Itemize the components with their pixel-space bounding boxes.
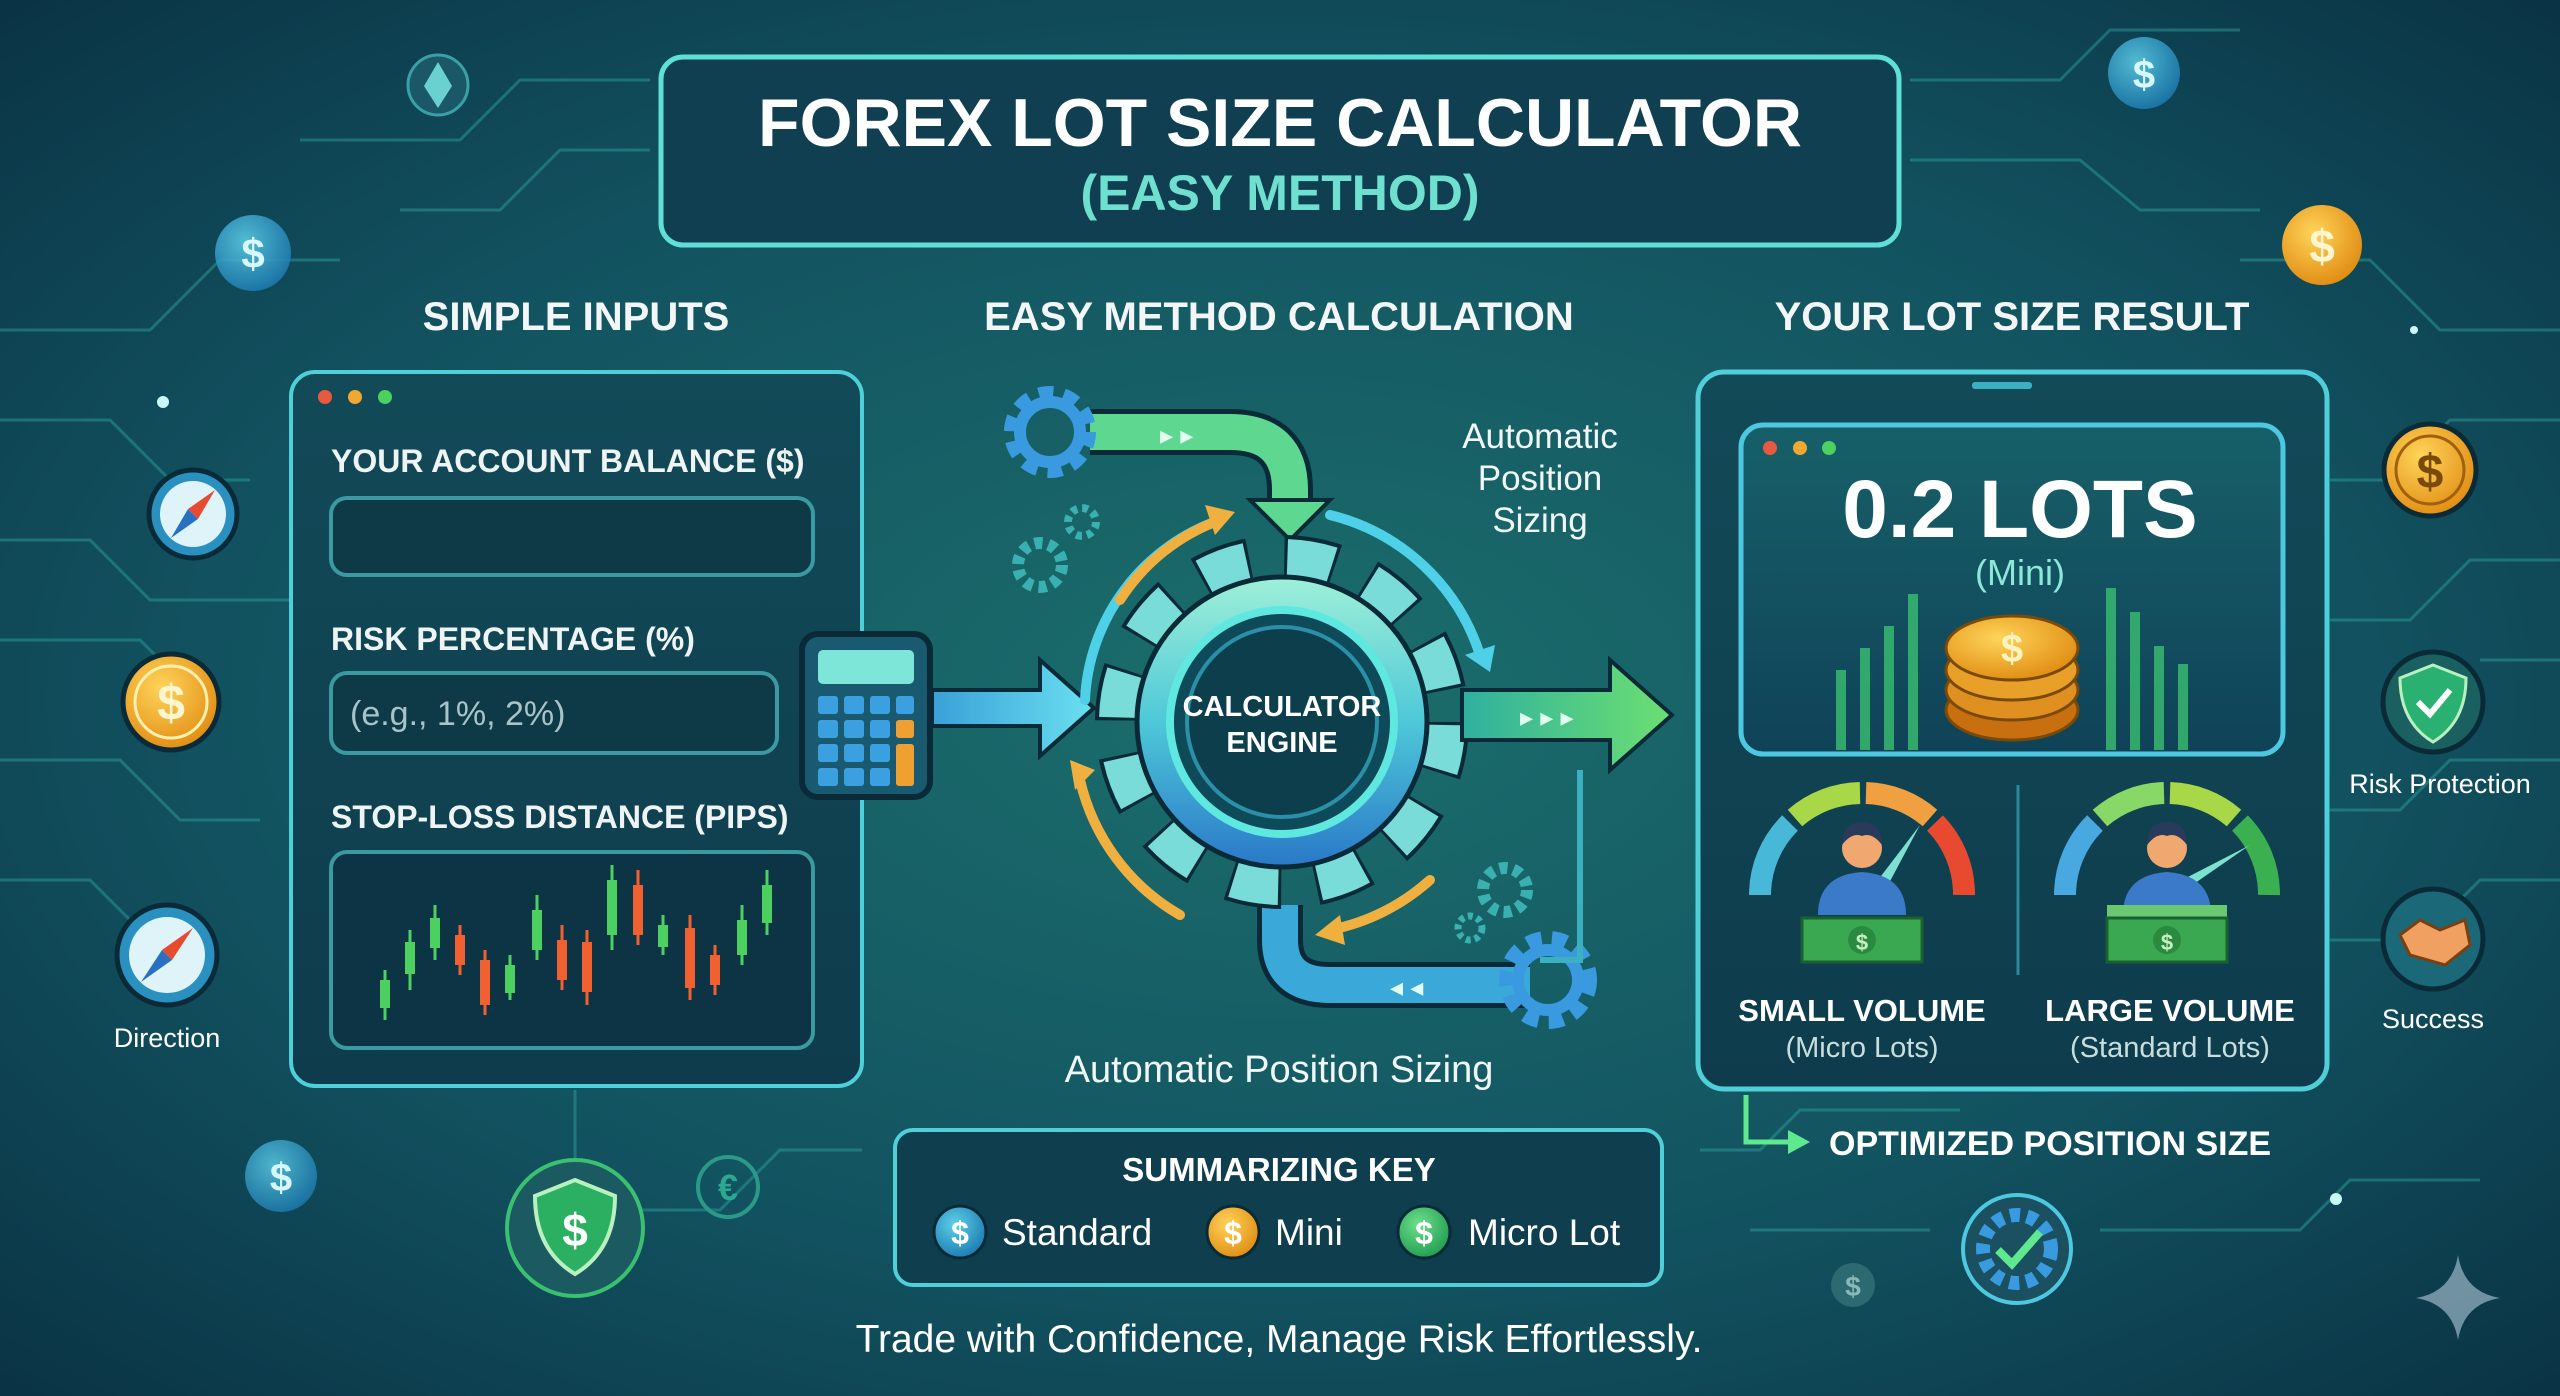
central gear: calculator engine [1122,562,1442,882]
gauge: small volume: $ [1856,930,1868,955]
label: stop-loss: STOP-LOSS DISTANCE (PIPS) [331,799,789,835]
arrow: engine to result [1462,660,1672,960]
icon: risk protection shield [2349,652,2531,799]
icon: coin orange left: $ [157,675,185,731]
legend: standard: $ [951,1215,969,1251]
heading: easy method calculation: EASY METHOD CALCULATION [984,295,1574,339]
subtitle: (EASY METHOD) [1080,165,1480,221]
legend: standard: Standard [1002,1212,1152,1253]
icon: risk protection shield: Risk Protection [2349,769,2531,799]
label: large volume: LARGE VOLUME [2045,993,2295,1028]
gauge: small volume: (Micro Lots) [1785,1032,1939,1064]
legend: mini: $ [1224,1215,1242,1251]
text: automatic position sizing (side): Sizing [1492,501,1588,540]
callout: optimized position size: OPTIMIZED POSITION SIZE [1829,1125,2271,1163]
label: account balance: YOUR ACCOUNT BALANCE ($) [331,443,804,479]
gauge: large volume: $ [2161,930,2173,955]
icon: coin top-right: $ [2133,53,2155,97]
panel: summarizing key: SUMMARIZING KEY [1122,1151,1436,1188]
text: automatic position sizing (side): Automatic [1462,417,1618,456]
icon: coin gold right [2384,424,2476,516]
heading: simple inputs: SIMPLE INPUTS [423,295,729,339]
icon: coin bottom-left: $ [270,1156,292,1200]
label: calculator engine: CALCULATOR [1183,691,1381,723]
result screen [1741,425,2283,754]
gauge: large volume [2045,793,2295,1064]
chart: candlesticks [331,852,813,1048]
icon: coin gold right: $ [2417,446,2444,499]
icon: sparkle [2416,1255,2500,1340]
panel: summarizing key [895,1130,1662,1285]
heading: your lot size result: YOUR LOT SIZE RESULT [1775,295,2249,339]
result value: 0.2 LOTS [1842,464,2198,555]
input: risk percentage [331,673,777,753]
legend: micro lot [1398,1206,1621,1258]
icon: euro [698,1157,758,1217]
circular flow arrows [1070,505,1495,945]
icon: coin top-left: $ [241,230,265,277]
result screen: (Mini) [1975,552,2065,593]
title: FOREX LOT SIZE CALCULATOR [758,85,1802,161]
footer tagline: Trade with Confidence, Manage Risk Effortlessly. [856,1318,1702,1361]
icon: coin bottom-left [245,1140,317,1212]
icon: compass direction: Direction [114,1023,220,1053]
text: automatic position sizing (bottom): Automatic Position Sizing [1065,1049,1493,1091]
title box [661,57,1899,245]
icon: coin top-right [2108,37,2180,109]
text: automatic position sizing (side) [1462,417,1618,540]
gauge: small volume [1738,793,1986,1064]
icon: coin orange left [123,654,219,750]
icon: shield dollar: $ [562,1204,588,1256]
bars [1836,588,2188,750]
label: risk percentage: RISK PERCENTAGE (%) [331,621,695,657]
icon: coin top-left [215,215,291,291]
flow: top green arrow [1090,420,1330,540]
legend: mini [1207,1206,1343,1258]
icon: gear check [1963,1195,2071,1303]
flow: bottom blue arrow [1280,905,1530,1002]
arrow: calculator to engine [932,660,1094,756]
legend: mini: Mini [1275,1212,1343,1253]
legend: micro lot: $ [1415,1215,1433,1251]
icon: small coin bottom [1831,1263,1875,1307]
gauge: large volume: (Standard Lots) [2070,1032,2270,1064]
text: automatic position sizing (side): Position [1478,459,1602,498]
callout: optimized position size [1746,1095,2271,1163]
icon: small gears [1012,394,1588,1020]
icon: calculator [802,634,930,797]
input: risk percentage: (e.g., 1%, 2%) [350,695,565,733]
input: account balance [331,498,813,575]
icon: ethereum [408,55,468,115]
flow: bottom blue arrow: ◂ ◂ [1390,972,1423,1002]
icon: compass 1 [149,470,237,558]
icon: coin stack: $ [2001,627,2023,671]
icon: shield dollar [507,1160,643,1296]
panel: lot size result [1698,372,2327,1089]
icon: compass direction [114,905,220,1053]
icon: success handshake: Success [2382,1004,2484,1034]
arrow: engine to result: ▸ ▸ ▸ [1520,702,1574,732]
legend: standard [934,1206,1152,1258]
legend: micro lot: Micro Lot [1468,1212,1621,1253]
flow: top green arrow: ▸ ▸ [1160,420,1193,450]
icon: coin orange top-right: $ [2309,220,2335,272]
icon: small coin bottom: $ [1845,1271,1861,1302]
icon: euro: € [718,1167,738,1208]
panel: simple inputs [291,372,862,1086]
icon: coin stack [1946,616,2078,740]
icon: coin orange top-right [2282,205,2362,285]
label: small volume: SMALL VOLUME [1738,993,1986,1028]
icon: success handshake [2382,889,2484,1034]
central gear: calculator engine: ENGINE [1226,727,1338,759]
